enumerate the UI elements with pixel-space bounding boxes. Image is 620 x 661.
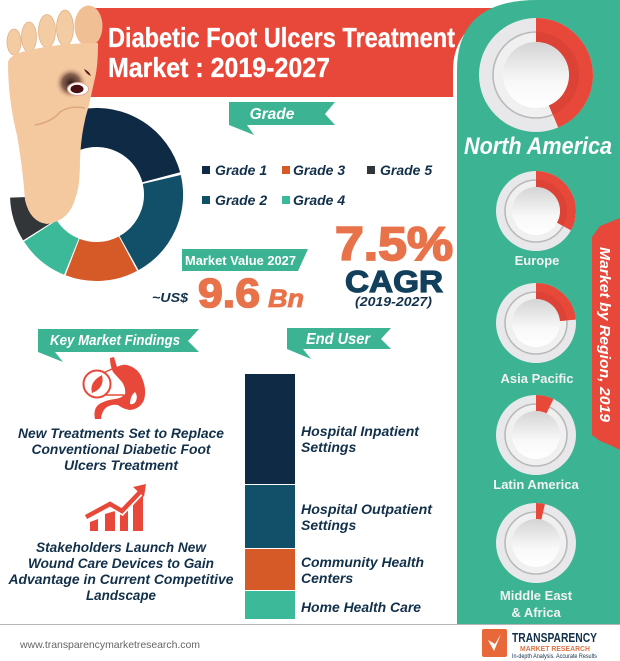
end user labels: Hospital Outpatient: [301, 501, 433, 517]
market value figure: ~US$: [152, 291, 189, 305]
end user labels: Hospital Inpatient: [301, 423, 420, 439]
end user labels: Centers: [301, 570, 353, 586]
finding text: stakeholders: [8, 539, 234, 603]
gauge: Asia Pacific: [496, 283, 576, 363]
market value figure: 9.6: [198, 270, 260, 316]
title banner: [90, 8, 497, 97]
logo: Transparency Market Research: In-depth Analysis. Accurate Results: [512, 653, 598, 660]
donut chart: grade: [4, 102, 189, 287]
side banner: Market by Region, 2019: Market by Region, 2019: [596, 247, 613, 423]
title banner: Diabetic Foot Ulcers Treatment: [108, 22, 455, 53]
label: Latin America: Latin America: [493, 477, 580, 492]
legend: grade: Grade 2: [215, 192, 267, 208]
panel: market by region: [457, 0, 620, 624]
market value figure: Bn: [268, 285, 304, 313]
legend: grade: [202, 162, 432, 208]
CAGR callout: 7.5%: [335, 217, 453, 270]
icon: foot with ulcer: [7, 6, 102, 224]
logo: Transparency Market Research: [482, 629, 598, 660]
ribbon: End User: [287, 328, 391, 359]
icon: stomach: [84, 357, 145, 419]
legend: grade: Grade 4: [293, 192, 345, 208]
title banner: Market : 2019-2027: [108, 52, 330, 83]
ribbon: Key Market Findings: [38, 329, 199, 362]
market value figure: [152, 270, 304, 316]
finding text: stakeholders: Stakeholders Launch New: [36, 539, 207, 555]
finding text: stakeholders: Landscape: [86, 587, 156, 603]
label: Middle East and Africa: & Africa: [511, 605, 561, 620]
logo: Transparency Market Research: TRANSPARENCY: [512, 630, 597, 645]
banner: Market Value 2027: Market Value 2027: [185, 253, 296, 268]
CAGR callout: CAGR: [345, 264, 443, 299]
end user labels: Community Health: [301, 554, 424, 570]
end user labels: [301, 423, 433, 615]
label: Europe: Europe: [515, 253, 559, 268]
finding text: new treatments: [18, 425, 224, 473]
legend: grade: Grade 3: [293, 162, 345, 178]
label: Asia Pacific: Asia Pacific: [500, 371, 574, 386]
finding text: stakeholders: Advantage in Current Competitive: [8, 571, 234, 587]
end user labels: Settings: [301, 517, 356, 533]
side banner: Market by Region, 2019: [592, 218, 620, 450]
legend: grade: Grade 1: [215, 162, 267, 178]
label: Middle East and Africa: [500, 588, 573, 620]
gauge: Europe: [496, 171, 576, 251]
ribbon: Grade: [229, 102, 335, 135]
gauge: Latin America: [496, 395, 576, 475]
finding text: stakeholders: Wound Care Devices to Gain: [28, 555, 214, 571]
ribbon: Grade: Grade: [250, 106, 295, 123]
legend: grade: Grade 5: [380, 162, 432, 178]
finding text: new treatments: New Treatments Set to Replace: [18, 425, 224, 441]
logo: Transparency Market Research: MARKET RESEARCH: [520, 644, 590, 653]
gauge: Middle East and Africa: [496, 503, 576, 583]
ribbon: Key Market Findings: Key Market Findings: [50, 333, 180, 349]
finding text: new treatments: Conventional Diabetic Foot: [32, 441, 212, 457]
label: Middle East and Africa: Middle East: [500, 588, 573, 603]
stacked bar chart: end user: [245, 374, 295, 619]
CAGR callout: [335, 217, 453, 309]
end user labels: Home Health Care: [301, 599, 421, 615]
ribbon: End User: End User: [306, 331, 371, 348]
icon: rising bar chart: [86, 484, 146, 531]
gauge: North America: [479, 18, 593, 132]
finding text: new treatments: Ulcers Treatment: [64, 457, 179, 473]
CAGR callout: (2019-2027): [355, 295, 432, 309]
footer url: www.transparencymarketresearch.com: [19, 639, 200, 651]
banner: Market Value 2027: [182, 249, 308, 271]
end user labels: Settings: [301, 439, 356, 455]
